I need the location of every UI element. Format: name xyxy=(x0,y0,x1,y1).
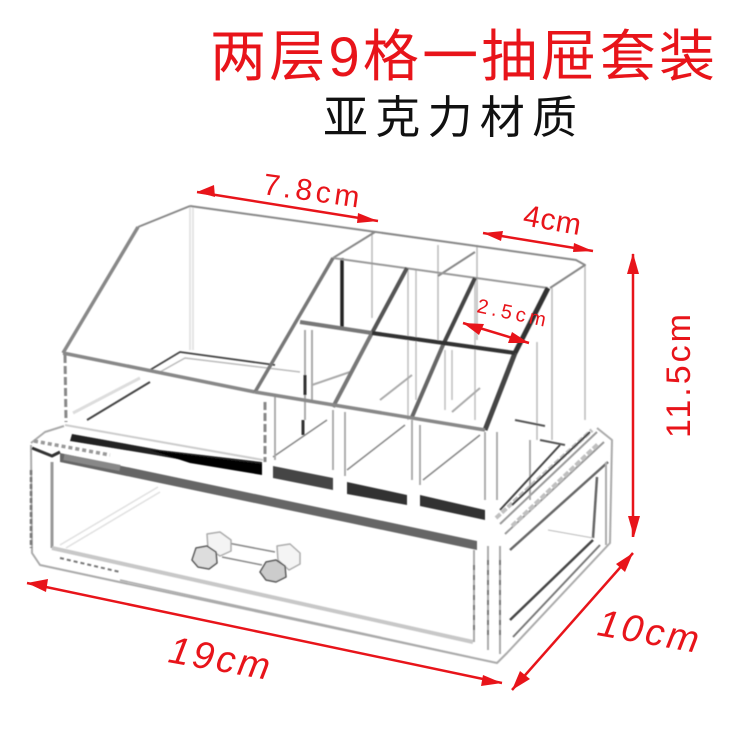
arrow: 10cm xyxy=(512,553,633,690)
drawer handle xyxy=(192,532,300,582)
dimension arrows xyxy=(27,185,640,690)
label: 19cm: 19cm xyxy=(165,630,273,689)
acrylic organizer xyxy=(31,206,612,663)
arrow: 19cm xyxy=(27,579,502,686)
label: 11.5cm: 11.5cm xyxy=(660,314,698,438)
right side rails xyxy=(500,432,604,534)
subtitle: 亚克力材质 xyxy=(323,92,577,143)
arrow: 4cm xyxy=(483,231,593,252)
drawer base xyxy=(31,426,612,663)
label: 10cm: 10cm xyxy=(594,603,702,662)
label: 2.5cm: 2.5cm xyxy=(475,295,548,331)
tray rim xyxy=(63,206,585,430)
tray glass lines behind xyxy=(65,206,590,510)
arrow: 11.5cm xyxy=(627,253,640,537)
title: 两层9格一抽屉套装 xyxy=(210,25,715,88)
arrow: 7.8cm xyxy=(197,185,378,223)
label: 7.8cm: 7.8cm xyxy=(261,168,362,214)
drawer top dark bar xyxy=(60,453,477,550)
arrow: 2.5cm xyxy=(463,323,529,343)
label: 4cm: 4cm xyxy=(521,199,584,242)
dark bars under tray xyxy=(70,434,262,474)
drawer front xyxy=(50,462,54,548)
